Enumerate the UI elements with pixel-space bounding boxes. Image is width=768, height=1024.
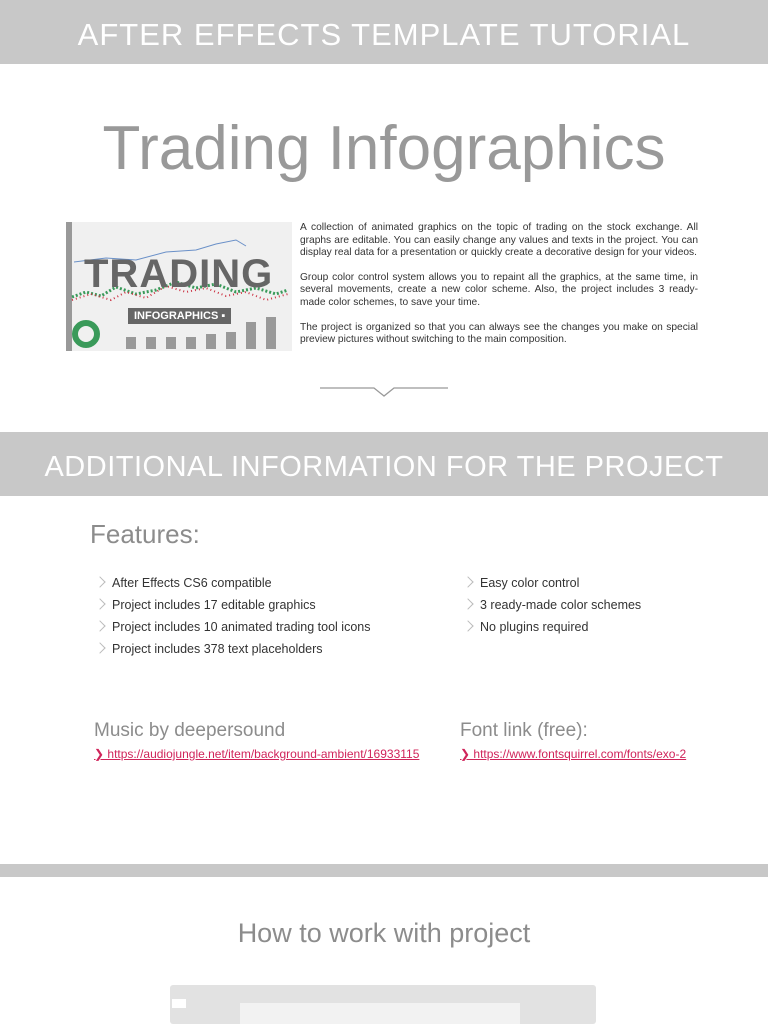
section bar: ADDITIONAL INFORMATION FOR THE PROJECT — [44, 451, 724, 483]
description text — [300, 222, 698, 345]
section bar — [0, 432, 768, 496]
music credit: ❯ https://audiojungle.net/item/background-ambient/16933115 — [94, 747, 419, 761]
font link: Font link (free): — [460, 720, 588, 741]
preview image — [66, 222, 292, 351]
font link — [460, 720, 686, 761]
features list left: After Effects CS6 compatible — [112, 576, 272, 590]
header bar: AFTER EFFECTS TEMPLATE TUTORIAL — [78, 17, 690, 52]
font link: ❯ https://www.fontsquirrel.com/fonts/exo-2 — [460, 747, 686, 761]
features list left: Project includes 378 text placeholders — [112, 642, 323, 656]
features list right: Easy color control — [480, 576, 579, 590]
features list right: 3 ready-made color schemes — [480, 598, 641, 612]
features list right: No plugins required — [480, 620, 588, 634]
features heading: Features: — [90, 519, 200, 549]
features list left: Project includes 17 editable graphics — [112, 598, 316, 612]
how to heading: How to work with project — [238, 918, 530, 948]
title: Trading Infographics — [103, 114, 665, 183]
preview image: TRADING — [84, 252, 273, 296]
features list left — [100, 576, 370, 656]
features list left: Project includes 10 animated trading tool icons — [112, 620, 370, 634]
music credit: Music by deepersound — [94, 720, 285, 741]
music credit — [94, 720, 420, 761]
description text: The project is organized so that you can always see the changes you make on special preview pictures without switching to the main composition. — [300, 322, 698, 345]
description text: A collection of animated graphics on the topic of trading on the stock exchange. All graphs are editable. You can easily change any values and texts in the project. You can display real data for a presentation or quickly create a decorative design for your videos. — [300, 222, 698, 258]
screenshot — [170, 985, 596, 1024]
divider arrow — [320, 387, 448, 397]
features list right — [468, 576, 641, 634]
separator bar — [0, 864, 768, 877]
description text: Group color control system allows you to repaint all the graphics, at the same time, in several movements, create a new color scheme. Also, the project includes 3 ready-made color schemes, to save your time. — [300, 272, 698, 308]
preview image: INFOGRAPHICS ▪ — [134, 310, 225, 322]
header bar — [0, 0, 768, 64]
